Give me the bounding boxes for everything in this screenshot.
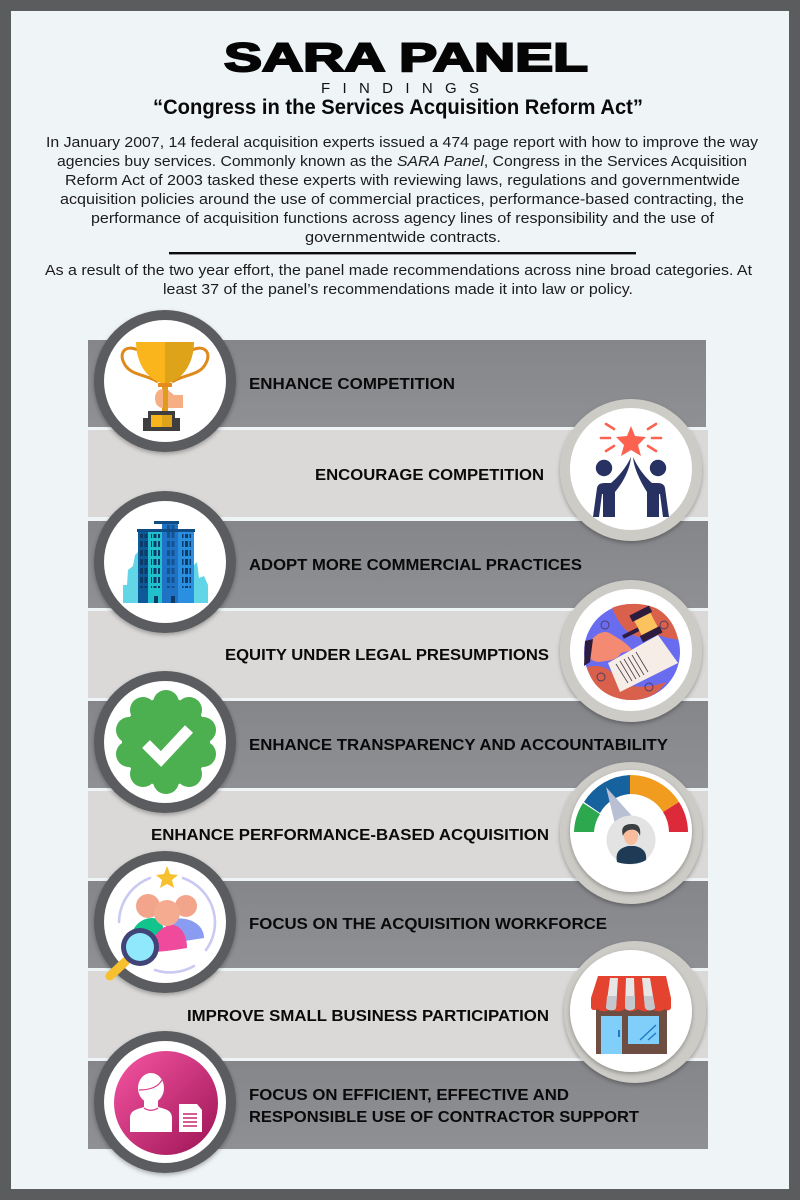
category labels: ADOPT MORE COMMERCIAL PRACTICES bbox=[249, 557, 582, 574]
category bands bbox=[88, 340, 708, 1149]
icon: contractor with document bbox=[94, 1031, 236, 1173]
category labels: IMPROVE SMALL BUSINESS PARTICIPATION bbox=[187, 1008, 549, 1025]
intro paragraph: agencies buy services. Commonly known as the SARA Panel , Congress in the Services Acquisition bbox=[57, 153, 747, 170]
intro paragraph: Reform Act of 2003 tasked these experts with reviewing laws, regulations and governmentwide bbox=[65, 172, 740, 189]
results paragraph: least 37 of the panel’s recommendations made it into law or policy. bbox=[163, 281, 633, 298]
category labels: ENHANCE PERFORMANCE-BASED ACQUISITION bbox=[151, 827, 549, 844]
title: SARA PANEL bbox=[224, 36, 588, 80]
icon: legal document and gavel bbox=[560, 580, 702, 722]
category labels: EQUITY UNDER LEGAL PRESUMPTIONS bbox=[225, 647, 549, 664]
intro paragraph: In January 2007, 14 federal acquisition experts issued a 474 page report with how to improve the way bbox=[46, 134, 759, 151]
heading: act name: “Congress in the Services Acquisition Reform Act” bbox=[153, 96, 643, 119]
icon: storefront bbox=[564, 941, 706, 1083]
category labels: ENCOURAGE COMPETITION bbox=[315, 467, 544, 484]
category labels: FOCUS ON THE ACQUISITION WORKFORCE bbox=[249, 916, 607, 933]
intro paragraph bbox=[46, 134, 759, 246]
icon: performance gauge bbox=[560, 762, 702, 904]
icon: verified badge bbox=[94, 671, 236, 813]
intro paragraph: acquisition policies around the use of commercial practices, performance-based contracting, the bbox=[60, 191, 744, 208]
results paragraph bbox=[45, 262, 753, 298]
intro paragraph: governmentwide contracts. bbox=[305, 229, 501, 246]
category labels: ENHANCE TRANSPARENCY AND ACCOUNTABILITY bbox=[249, 737, 668, 754]
category labels bbox=[151, 376, 668, 1126]
icon: trophy bbox=[94, 310, 236, 452]
icon: office building bbox=[94, 491, 236, 633]
category labels: RESPONSIBLE USE OF CONTRACTOR SUPPORT bbox=[249, 1109, 639, 1126]
results paragraph: As a result of the two year effort, the panel made recommendations across nine broad categories. At bbox=[45, 262, 753, 279]
icon: team under magnifier bbox=[94, 851, 236, 993]
icon: high five bbox=[560, 399, 702, 541]
subtitle: findings: FINDINGS bbox=[321, 80, 479, 97]
category labels: FOCUS ON EFFICIENT, EFFECTIVE AND bbox=[249, 1087, 569, 1104]
intro paragraph: performance of acquisition functions across agency lines of responsibility and the use of bbox=[91, 210, 715, 227]
category labels: ENHANCE COMPETITION bbox=[249, 376, 455, 393]
